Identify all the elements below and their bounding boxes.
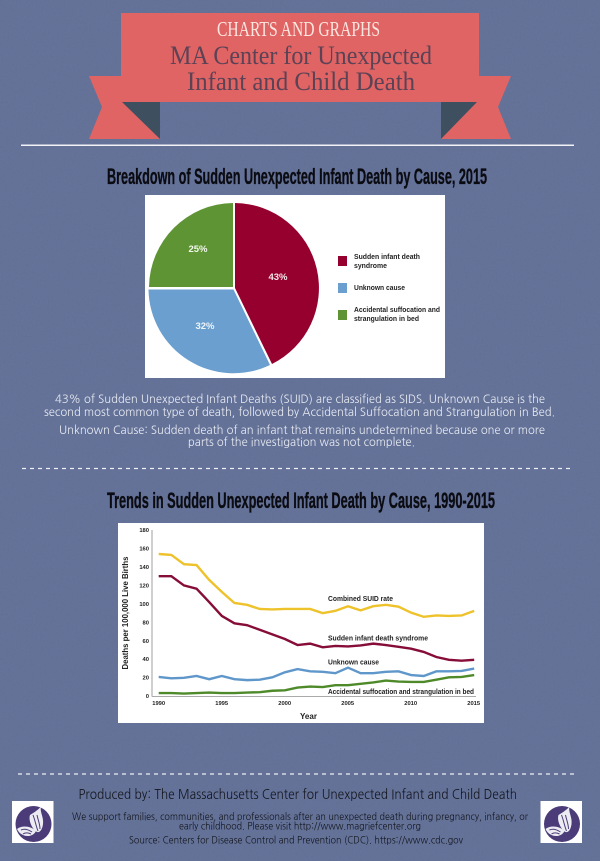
label 25%: 25% bbox=[188, 244, 208, 255]
y axis tick labels: 120 bbox=[139, 584, 149, 590]
y axis tick labels: 160 bbox=[139, 546, 149, 552]
text block: SUID summary bbox=[44, 393, 555, 418]
legend: sudden infant death syndrome: Sudden infant death bbox=[354, 254, 420, 261]
label: combined SUID rate: Combined SUID rate bbox=[328, 596, 393, 603]
footer: description bbox=[72, 811, 528, 832]
ribbon left tail bbox=[89, 76, 160, 139]
label: unknown cause: Unknown cause bbox=[328, 660, 379, 666]
footer: description: We support families, communities, and professionals after an unexpected death during pregnancy, infancy, or bbox=[72, 811, 528, 822]
ribbon title line 2: Infant and Child Death bbox=[187, 67, 415, 96]
y axis tick labels: 80 bbox=[143, 620, 149, 626]
label 43%: 43% bbox=[268, 272, 288, 283]
x axis tick labels: 2010 bbox=[404, 701, 417, 707]
line: unknown cause bbox=[159, 668, 474, 680]
y axis title: Deaths per 100,000 Live Births bbox=[121, 556, 130, 670]
x axis tick labels: 2000 bbox=[278, 701, 291, 707]
panel: pie chart bbox=[145, 195, 445, 378]
y axis tick labels: 100 bbox=[139, 602, 149, 608]
label 32%: 32% bbox=[195, 321, 215, 332]
legend: accidental suffocation: Accidental suffocation and bbox=[354, 307, 440, 314]
y axis tick labels: 20 bbox=[143, 676, 149, 682]
text block: unknown cause definition: Unknown Cause: Sudden death of an infant that remains undetermined because one or more bbox=[59, 424, 545, 436]
x axis tick labels: 1995 bbox=[215, 701, 229, 707]
title ribbon bbox=[89, 13, 511, 139]
x axis tick labels: 1990 bbox=[152, 701, 165, 707]
legend: accidental suffocation bbox=[338, 307, 440, 323]
label: sudden infant death syndrome: Sudden infant death syndrome bbox=[328, 636, 428, 642]
x axis tick labels: 2015 bbox=[467, 701, 481, 707]
slice: sudden infant death syndrome 43% bbox=[235, 203, 319, 364]
ribbon main band bbox=[121, 13, 479, 102]
ribbon right tail bbox=[441, 76, 511, 139]
legend: sudden infant death syndrome bbox=[338, 254, 420, 270]
ribbon right fold bbox=[441, 102, 477, 139]
slice: accidental suffocation 25% bbox=[149, 203, 233, 287]
y axis tick labels: 60 bbox=[143, 639, 149, 645]
x axis tick labels bbox=[152, 701, 481, 707]
ribbon left fold bbox=[122, 102, 160, 139]
label: accidental suffocation: Accidental suffocation and strangulation in bed bbox=[328, 689, 474, 696]
y axis tick labels: 140 bbox=[139, 565, 149, 571]
footer: source: Source: Centers for Disease Control and Prevention (CDC). https://www.cdc.gov bbox=[129, 834, 463, 846]
panel: line chart bbox=[118, 523, 484, 723]
x axis title: Year bbox=[300, 711, 318, 721]
icon: left butterfly logo bbox=[12, 801, 54, 843]
line: sudden infant death syndrome bbox=[159, 576, 474, 661]
y axis tick labels: 40 bbox=[143, 657, 149, 663]
footer: producer credit: Produced by: The Massachusetts Center for Unexpected Infant and Child Death bbox=[78, 788, 517, 801]
y axis tick labels: 180 bbox=[139, 528, 149, 534]
ribbon subtitle: CHARTS AND GRAPHS bbox=[217, 17, 380, 41]
x axis tick labels: 2005 bbox=[341, 701, 355, 707]
text block: unknown cause definition: parts of the investigation was not complete. bbox=[188, 436, 415, 448]
axes bbox=[152, 530, 476, 696]
text block: SUID summary: second most common type of death, followed by Accidental Suffocation and Strangulation in Bed. bbox=[44, 406, 555, 418]
line: accidental suffocation bbox=[159, 675, 474, 694]
legend: sudden infant death syndrome: syndrome bbox=[354, 263, 387, 270]
y axis tick labels bbox=[139, 528, 149, 700]
legend: unknown cause bbox=[338, 283, 405, 293]
legend: unknown cause: Unknown cause bbox=[354, 285, 405, 292]
icon: right butterfly logo bbox=[540, 801, 582, 843]
text block: SUID summary: 43% of Sudden Unexpected Infant Deaths (SUID) are classified as SIDS. Unknown Cause is the bbox=[55, 393, 545, 405]
line: combined SUID rate bbox=[159, 554, 474, 617]
slice: unknown cause 32% bbox=[148, 290, 270, 373]
legend: accidental suffocation: strangulation in bed bbox=[354, 316, 419, 323]
ribbon title line 1: MA Center for Unexpected bbox=[170, 41, 432, 70]
footer: description: early childhood. Please visit http://www.magriefcenter.org bbox=[179, 820, 421, 832]
y axis tick labels: 0 bbox=[146, 694, 149, 700]
text block: unknown cause definition bbox=[59, 424, 545, 448]
